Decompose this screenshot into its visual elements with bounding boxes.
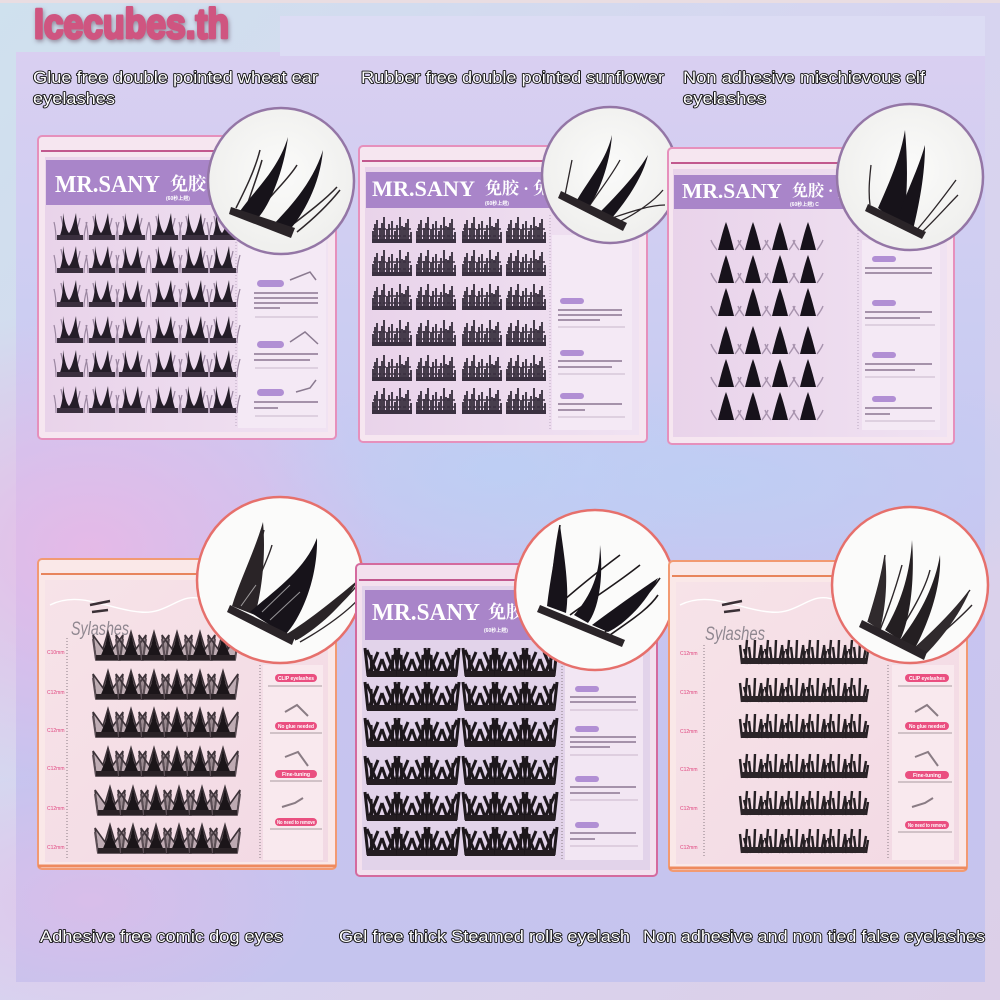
panel: product 4: [38, 497, 363, 869]
lash rows: [711, 222, 823, 420]
length scale: C12mm: [47, 766, 65, 772]
caption: comic dog eyes: Adhesive free comic dog eyes: [40, 927, 283, 946]
panel: product 1: [38, 108, 354, 439]
header band: (60秒上翘): [166, 195, 190, 202]
brand: Sylashes: [705, 624, 765, 645]
header band: 免胶 · 免: [792, 181, 853, 200]
header band: [365, 590, 535, 640]
instruction column: No glue needed: [909, 724, 945, 730]
length scale: C12mm: [680, 690, 698, 696]
header band: [46, 160, 218, 205]
instruction column: [858, 215, 940, 430]
instruction column: No need to remove: [277, 820, 315, 826]
inset: lash close-up: [197, 497, 363, 663]
inset: lash close-up: [832, 507, 988, 663]
header band: [366, 172, 556, 208]
header band: [674, 175, 854, 209]
length scale: [680, 645, 704, 858]
caption: sunflower: Rubber free double pointed sunflower: [361, 68, 664, 87]
panel: product 2: [359, 107, 678, 442]
header band: (60秒上翘) C: [790, 201, 819, 208]
length scale: C12mm: [47, 728, 65, 734]
lash rows: [372, 217, 546, 414]
instruction column: No glue needed: [278, 724, 314, 730]
watermark logo: Icecubes.th: [34, 0, 229, 47]
caption: non tied: Non adhesive and non tied false eyelashes: [643, 927, 985, 946]
brand: [680, 598, 835, 645]
header band: (60秒上翘): [485, 200, 509, 207]
header band: 免胶 · 免: [485, 178, 550, 198]
caption: elf: eyelashes: [683, 89, 766, 108]
header band: MR.SANY: [372, 176, 475, 201]
header band: MR.SANY: [372, 600, 480, 626]
inset: lash close-up: [515, 510, 675, 670]
inset: lash close-up: [837, 104, 983, 250]
panel: product 5: [356, 510, 675, 876]
instruction column: CLIP eyelashes: [909, 676, 945, 682]
length scale: C12mm: [47, 806, 65, 812]
instruction column: [562, 645, 643, 860]
brand: Sylashes: [71, 619, 129, 640]
inset: lash close-up: [208, 108, 354, 254]
length scale: C12mm: [680, 651, 698, 657]
length scale: C10mm: [47, 650, 65, 656]
caption: wheat ear: eyelashes: [33, 89, 115, 108]
brand: [50, 598, 205, 640]
length scale: C12mm: [680, 845, 698, 851]
instruction column: Fine-tuning: [282, 772, 310, 778]
header band: MR.SANY: [55, 172, 160, 198]
panel: product 6: [669, 507, 988, 871]
caption: steamed rolls: Gel free thick Steamed rolls eyelash: [339, 927, 630, 946]
length scale: [47, 638, 67, 858]
header band: 免胶: [488, 601, 526, 622]
caption: elf: Non adhesive mischievous elf: [683, 68, 925, 87]
inset: lash close-up: [542, 107, 678, 243]
caption: wheat ear: Glue free double pointed wheat ear: [33, 68, 318, 87]
length scale: C12mm: [47, 690, 65, 696]
panel: product 3: [668, 104, 983, 444]
header band: MR.SANY: [682, 179, 782, 203]
instruction column: No need to remove: [908, 823, 946, 829]
length scale: C12mm: [680, 806, 698, 812]
lash rows: [54, 213, 240, 413]
instruction column: CLIP eyelashes: [278, 676, 314, 682]
instruction column: Fine-tuning: [913, 773, 941, 779]
header band: (60秒上翘): [484, 627, 508, 634]
lash rows: [93, 632, 240, 853]
instruction column: [236, 206, 326, 428]
lash rows: [740, 640, 868, 853]
length scale: C12mm: [47, 845, 65, 851]
instruction column: [550, 215, 632, 430]
instruction column: [888, 665, 954, 860]
length scale: C12mm: [680, 767, 698, 773]
length scale: C12mm: [680, 729, 698, 735]
header band: 免胶: [170, 173, 208, 194]
lash rows: [365, 648, 557, 856]
instruction column: [260, 665, 323, 860]
